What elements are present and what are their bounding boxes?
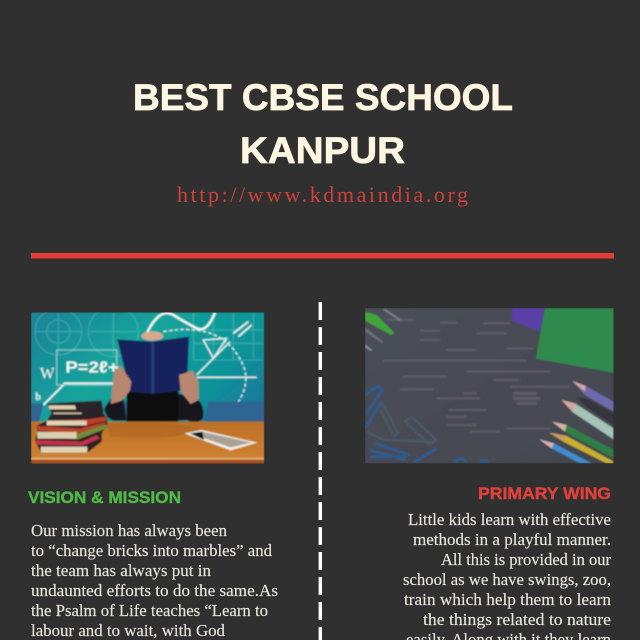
website url: http://www.kdmaindia.org: [177, 182, 468, 207]
dashed column divider: [319, 302, 322, 640]
body text: vision and mission: labour and to wait, with God: [31, 621, 225, 640]
heading: primary wing: PRIMARY WING: [478, 485, 611, 503]
body text: vision and mission: to “change bricks into marbles” and: [31, 541, 272, 560]
body text: primary wing: train which help them to learn: [404, 590, 611, 609]
body text: vision and mission: undaunted efforts to do the same.As: [31, 581, 278, 600]
body text: primary wing: Little kids learn with effective: [408, 510, 611, 529]
body text: primary wing: school as we have swings, zoo,: [403, 570, 611, 589]
body text: vision and mission: the team has always put in: [31, 561, 211, 580]
tablet: [184, 430, 257, 450]
body text: vision and mission: Our mission has always been: [31, 521, 227, 540]
body text: primary wing: [403, 510, 611, 640]
photo: student reading behind a book at a desk: [31, 307, 264, 464]
title: BEST CBSE SCHOOL: [133, 77, 513, 118]
title: [133, 77, 513, 171]
body text: vision and mission: the Psalm of Life teaches “Learn to: [31, 601, 268, 620]
body text: primary wing: the things related to nature: [423, 610, 611, 629]
body text: vision and mission: [31, 521, 278, 640]
red divider: [31, 253, 614, 258]
panel: primary wing: [403, 485, 611, 640]
photo: school supplies on a dark wooden table: [365, 308, 614, 463]
heading: vision and mission: VISION & MISSION: [28, 489, 181, 507]
paper clips: [365, 386, 488, 463]
pencils: [572, 381, 614, 412]
hands holding the book: [111, 366, 131, 404]
photo: student reading behind a book at a desk: W: [40, 366, 55, 383]
title: KANPUR: [240, 130, 405, 171]
panel: vision and mission: [28, 489, 278, 640]
photo: student reading behind a book at a desk: b²: [212, 404, 222, 418]
body text: primary wing: methods in a playful manner.: [413, 530, 611, 549]
book stack: [35, 401, 107, 453]
photo: student reading behind a book at a desk: P=2ℓ+: [65, 360, 119, 377]
photo: student reading behind a book at a desk: b: [35, 392, 41, 403]
body text: primary wing: All this is provided in our: [441, 550, 611, 569]
